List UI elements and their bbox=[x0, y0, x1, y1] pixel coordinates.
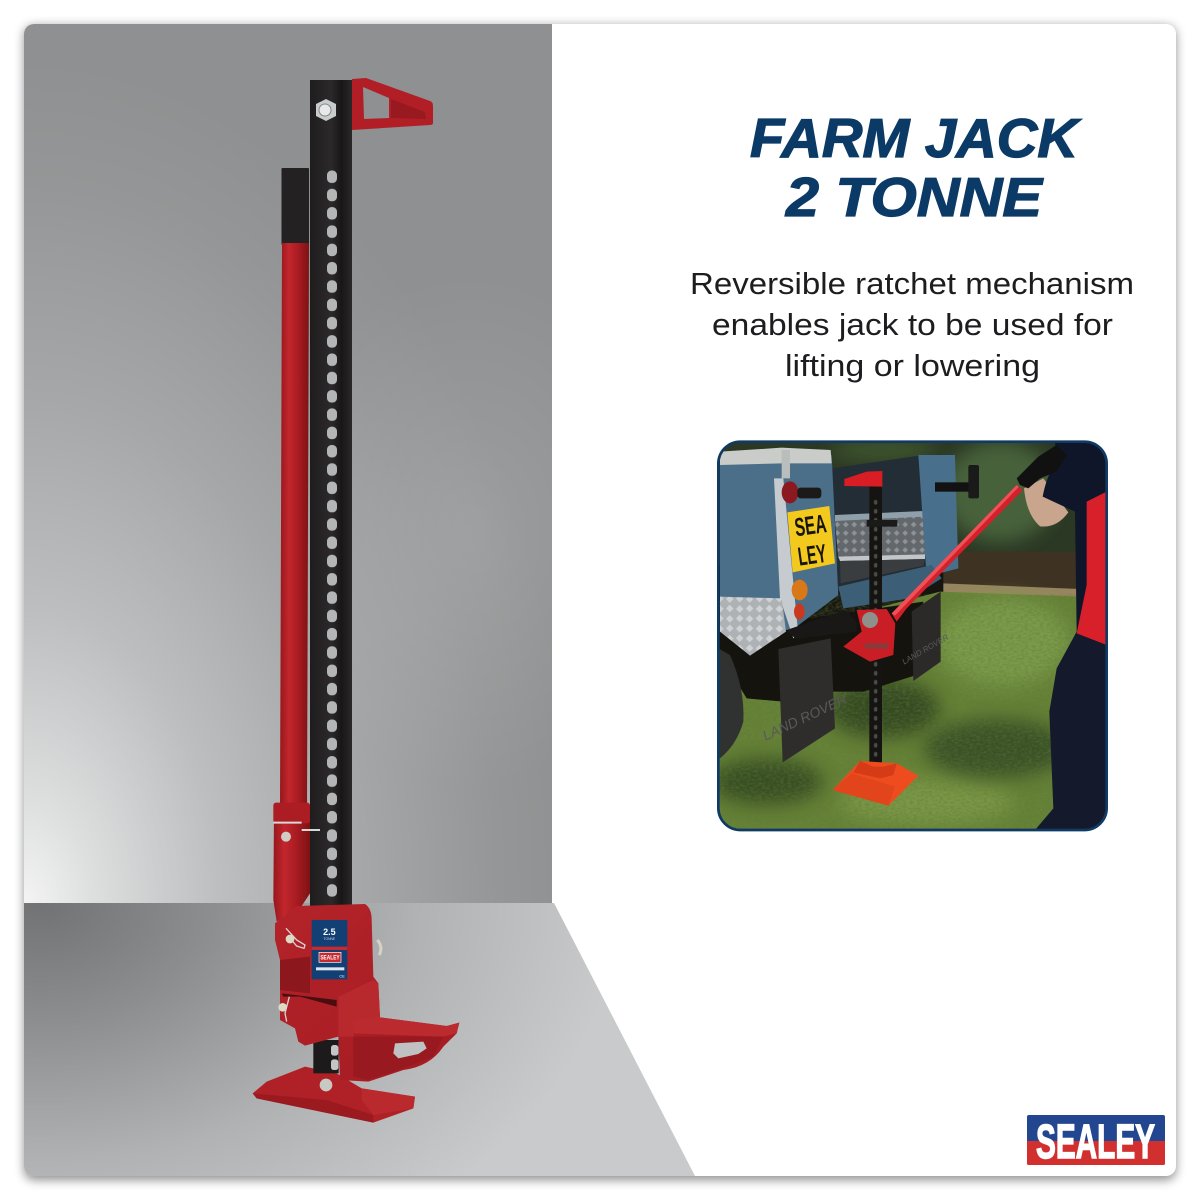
handle tube bbox=[280, 243, 309, 806]
red tail light bbox=[782, 481, 798, 503]
jack top bracket bbox=[844, 471, 882, 487]
right mudflap bbox=[901, 592, 950, 681]
casting shadows bbox=[280, 957, 310, 993]
red jack handle bbox=[892, 485, 1023, 622]
top lifting bracket bbox=[352, 78, 433, 130]
pins bbox=[286, 935, 294, 943]
under vehicle bbox=[718, 602, 923, 702]
jack mechanism and base bbox=[253, 803, 459, 1123]
jack product image bbox=[253, 78, 459, 1123]
top rail bbox=[720, 448, 832, 465]
left mudflap: LAND ROVER bbox=[760, 691, 849, 744]
jack clamp bbox=[867, 520, 897, 527]
panel: studio background bbox=[24, 24, 695, 1176]
galvanised strip bbox=[774, 478, 798, 638]
hi-lift jack bar bbox=[869, 485, 882, 765]
title: FARM JACK bbox=[750, 107, 1082, 169]
blue vehicle body bbox=[720, 450, 838, 632]
socket bolt bbox=[281, 832, 291, 842]
person: shirt red panel bbox=[1077, 492, 1107, 645]
wire clip bbox=[273, 823, 320, 830]
foot hole bbox=[393, 1042, 427, 1058]
jack bar bbox=[310, 80, 352, 908]
title bbox=[750, 107, 1082, 228]
orange indicator bbox=[792, 580, 808, 600]
description text: Reversible ratchet mechanism bbox=[690, 266, 1134, 301]
cotter pins bbox=[285, 928, 305, 1022]
title: 2 TONNE bbox=[785, 166, 1044, 228]
grass bbox=[718, 592, 1107, 830]
photo border bbox=[718, 442, 1107, 830]
small red reflector bbox=[794, 604, 805, 620]
base plate bbox=[253, 1067, 415, 1123]
grass texture bbox=[718, 595, 1107, 830]
side pin bbox=[377, 940, 381, 955]
rear checker plate bbox=[720, 597, 786, 656]
tyre bbox=[718, 648, 743, 758]
label: SEALEY bbox=[320, 955, 340, 962]
backdrop bbox=[720, 565, 944, 632]
person: shirt navy bbox=[1043, 442, 1107, 645]
lower bar bbox=[313, 1040, 339, 1073]
light grass bbox=[937, 598, 1070, 685]
description text bbox=[690, 266, 1134, 383]
top bolt bbox=[316, 99, 336, 121]
base bolt bbox=[320, 1079, 332, 1091]
label: CE bbox=[339, 973, 345, 978]
right mudflap: LAND ROVER bbox=[901, 633, 950, 666]
rear bumper bbox=[787, 610, 857, 638]
socket bbox=[273, 813, 310, 922]
top plate of foot bbox=[353, 1017, 459, 1037]
label: 2.5 bbox=[323, 927, 336, 937]
jack mechanism bbox=[843, 609, 895, 662]
label: TONNE bbox=[324, 937, 336, 941]
hedge bbox=[718, 442, 1107, 565]
description text: lifting or lowering bbox=[785, 348, 1040, 383]
wall bbox=[24, 24, 552, 904]
orange base bbox=[833, 761, 918, 806]
person: arm bbox=[1024, 478, 1068, 527]
left mudflap bbox=[760, 638, 849, 762]
collar bbox=[273, 803, 310, 823]
person: trousers bbox=[1035, 632, 1107, 830]
light housing bbox=[797, 488, 821, 498]
label bbox=[312, 920, 347, 979]
tailgate interior bbox=[832, 455, 927, 592]
person: glove bbox=[1017, 445, 1067, 488]
jack bar holes bbox=[325, 168, 339, 900]
handle grip bbox=[282, 168, 309, 245]
main casting bbox=[275, 904, 459, 1082]
number plate bbox=[787, 506, 835, 572]
description text: enables jack to be used for bbox=[712, 307, 1113, 342]
number plate: SEA bbox=[793, 508, 828, 542]
right tail lamp handle bbox=[935, 465, 979, 498]
wall highlight bbox=[405, 434, 544, 620]
grass shadows bbox=[827, 678, 940, 738]
number plate: LEY bbox=[796, 538, 828, 572]
photo: jack lifting a vehicle bbox=[710, 440, 1107, 830]
floor bbox=[24, 903, 695, 1176]
path bbox=[943, 552, 1076, 592]
